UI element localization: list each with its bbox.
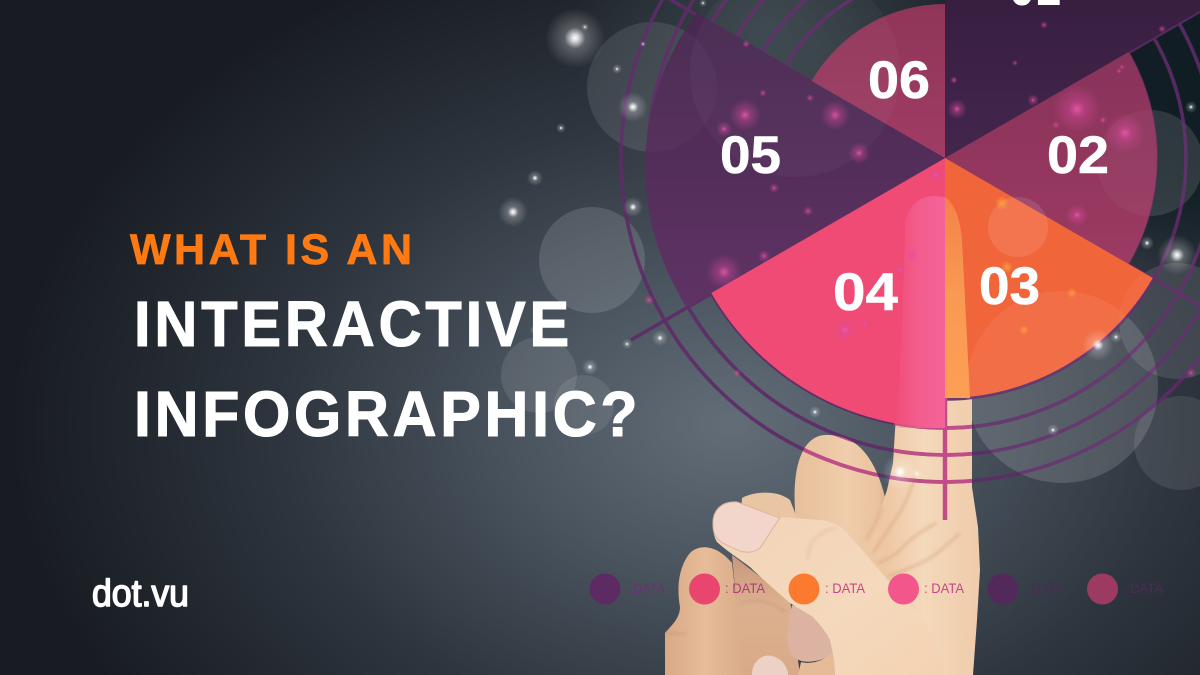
sector 03	[945, 158, 1153, 398]
lower left finger	[665, 547, 745, 675]
legend	[590, 574, 1164, 604]
sparkles	[498, 0, 1197, 490]
legend item 5: : DATA	[1024, 580, 1065, 596]
palm creases	[866, 478, 960, 577]
middle finger	[795, 435, 890, 590]
title line: what is an: WHAT IS AN	[130, 226, 412, 274]
sector 06	[812, 4, 945, 158]
pie wheel	[645, 0, 1200, 428]
thumb knuckle lines	[808, 528, 837, 560]
dot.vu logo: dot.vu	[92, 573, 189, 615]
legend item 2	[689, 574, 766, 604]
legend item 4: : DATA	[924, 580, 965, 596]
title line: interactive: INTERACTIVE	[134, 289, 569, 360]
rings and spokes	[621, 0, 1200, 482]
hand illustration	[665, 196, 980, 675]
legend item 3: : DATA	[825, 580, 866, 596]
wheel number 04: 04	[833, 263, 899, 322]
legend item 6	[1087, 574, 1164, 604]
legend item 5	[988, 574, 1065, 604]
legend item 1: : DATA	[626, 580, 666, 596]
thumb	[713, 502, 943, 675]
sector 01	[945, 0, 1200, 158]
wheel bokeh overlay	[587, 0, 1200, 483]
ring finger knuckle	[740, 493, 800, 550]
legend item 4	[888, 574, 965, 604]
legend item 2: : DATA	[725, 580, 766, 596]
title	[130, 226, 638, 450]
finger crease	[665, 601, 785, 634]
rings over the skin	[802, 423, 972, 484]
wheel number 03: 03	[979, 257, 1040, 316]
vertical spoke line	[943, 390, 947, 520]
thumb nail	[713, 502, 780, 552]
index finger and palm	[835, 196, 980, 675]
legend item 1	[590, 574, 666, 604]
bottom finger nail	[752, 656, 788, 675]
sector 05	[645, 13, 945, 307]
wheel number 02: 02	[1047, 126, 1109, 185]
second lower finger	[732, 555, 800, 675]
sector 02	[945, 52, 1157, 264]
title line: infographic: INFOGRAPHIC?	[134, 379, 638, 450]
legend item 3	[788, 574, 866, 604]
wheel number 05: 05	[720, 126, 781, 185]
wheel number 06: 06	[868, 51, 930, 110]
finger seen through wheel	[896, 196, 970, 428]
bokeh circles	[501, 22, 1200, 490]
sector 04	[711, 158, 945, 428]
pinky with nail	[787, 605, 836, 662]
legend item 6: : DATA	[1123, 580, 1164, 596]
pinky base	[798, 652, 840, 675]
